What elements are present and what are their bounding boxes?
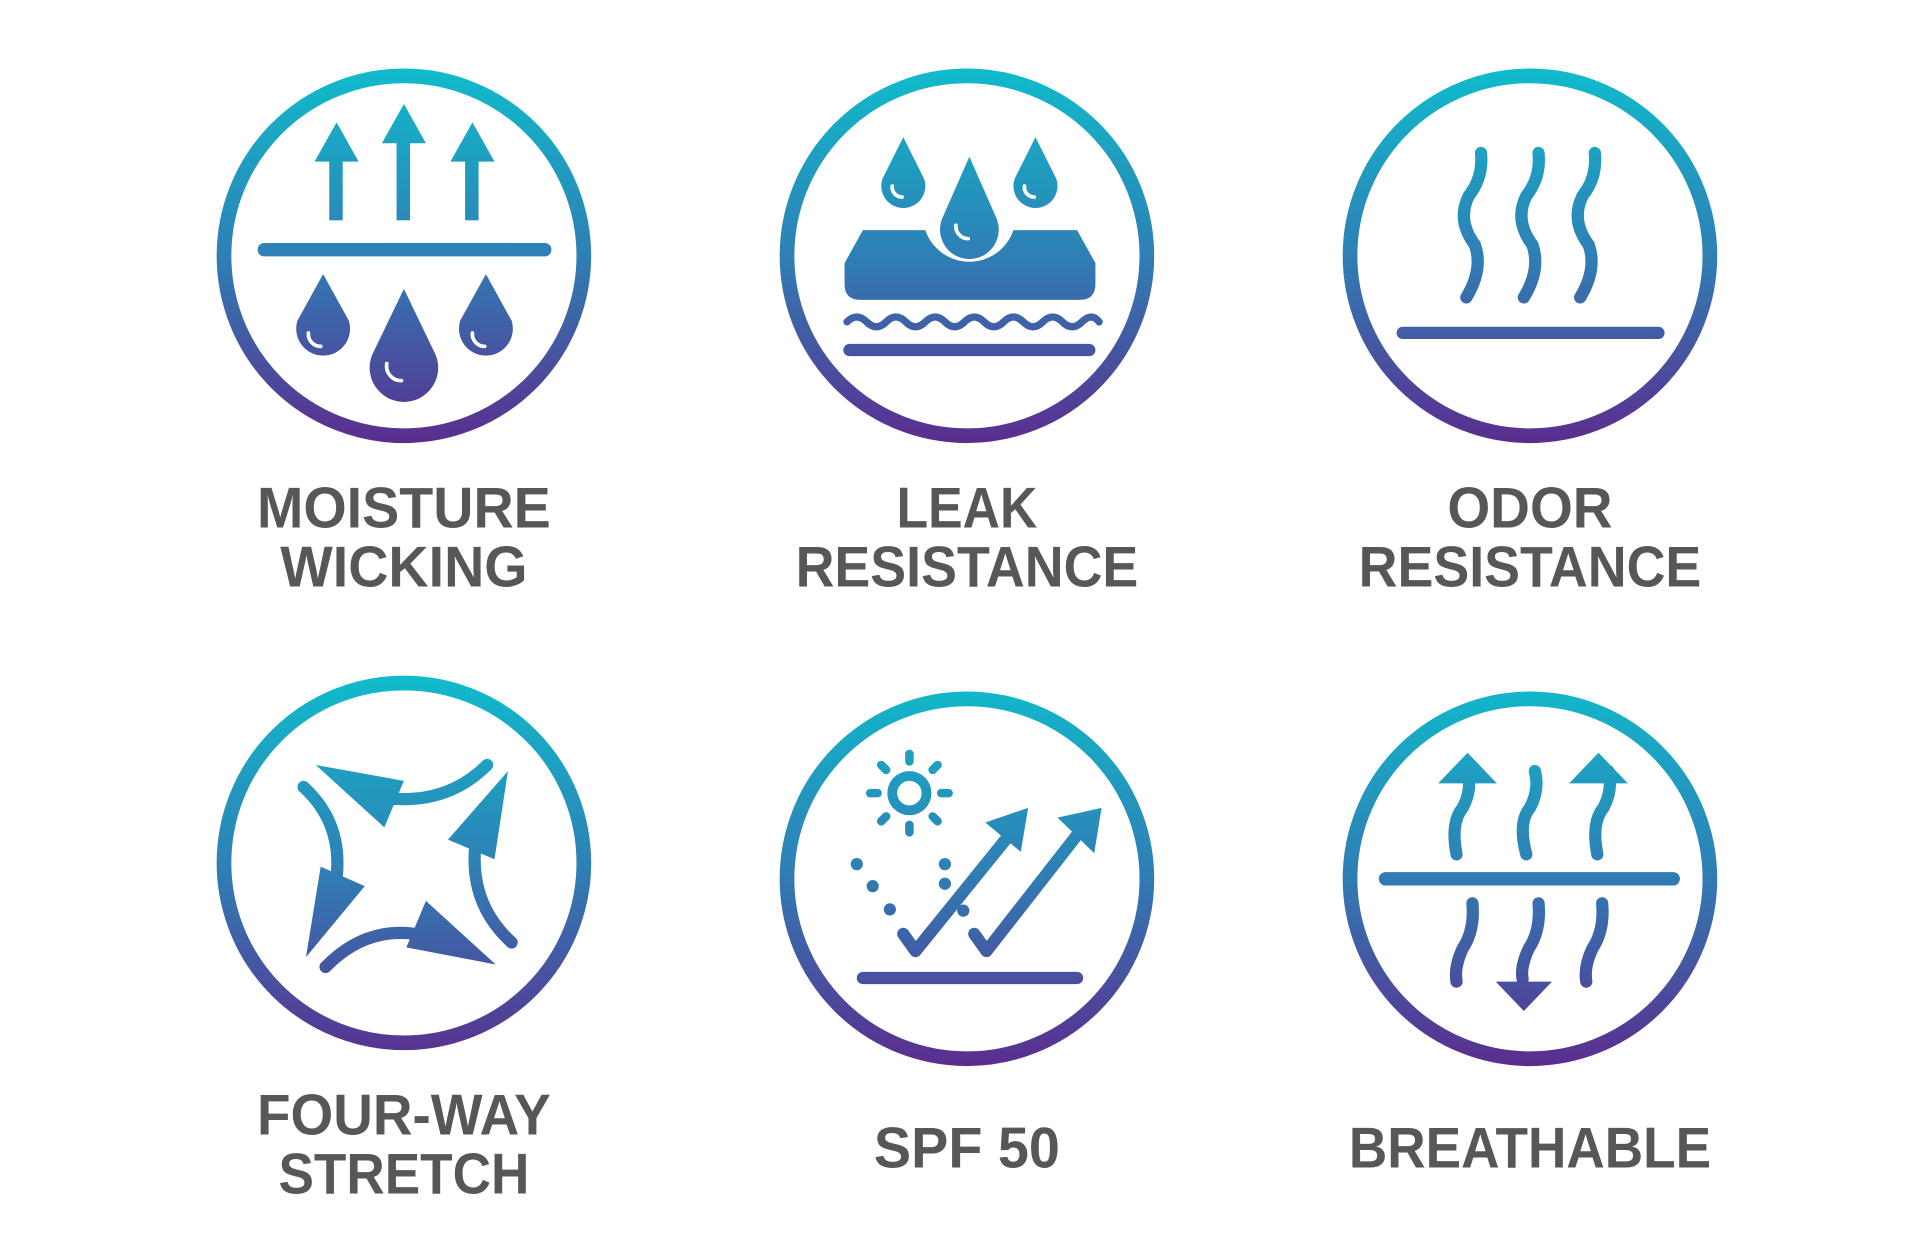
icon: moisture wicking <box>224 76 584 436</box>
label: leak resistance <box>796 477 1138 599</box>
label: moisture wicking: MOISTURE <box>257 477 551 541</box>
icon: leak resistance <box>787 76 1147 436</box>
label: moisture wicking <box>257 477 551 599</box>
icon: odor resistance <box>1350 76 1710 436</box>
label: odor resistance: ODOR <box>1447 477 1613 541</box>
icon: four-way stretch <box>224 683 584 1043</box>
label: odor resistance: RESISTANCE <box>1359 535 1701 599</box>
label: four-way stretch: FOUR-WAY <box>257 1084 551 1148</box>
label: four-way stretch <box>257 1084 551 1206</box>
icon: breathable <box>1350 699 1710 1059</box>
label: leak resistance: LEAK <box>897 477 1037 541</box>
label: four-way stretch: STRETCH <box>278 1142 529 1206</box>
label: odor resistance <box>1359 477 1701 599</box>
label: SPF 50: SPF 50 <box>874 1117 1060 1181</box>
icon: SPF 50 <box>787 699 1147 1059</box>
label: leak resistance: RESISTANCE <box>796 535 1138 599</box>
label: moisture wicking: WICKING <box>280 535 528 599</box>
label: breathable: BREATHABLE <box>1349 1117 1711 1181</box>
